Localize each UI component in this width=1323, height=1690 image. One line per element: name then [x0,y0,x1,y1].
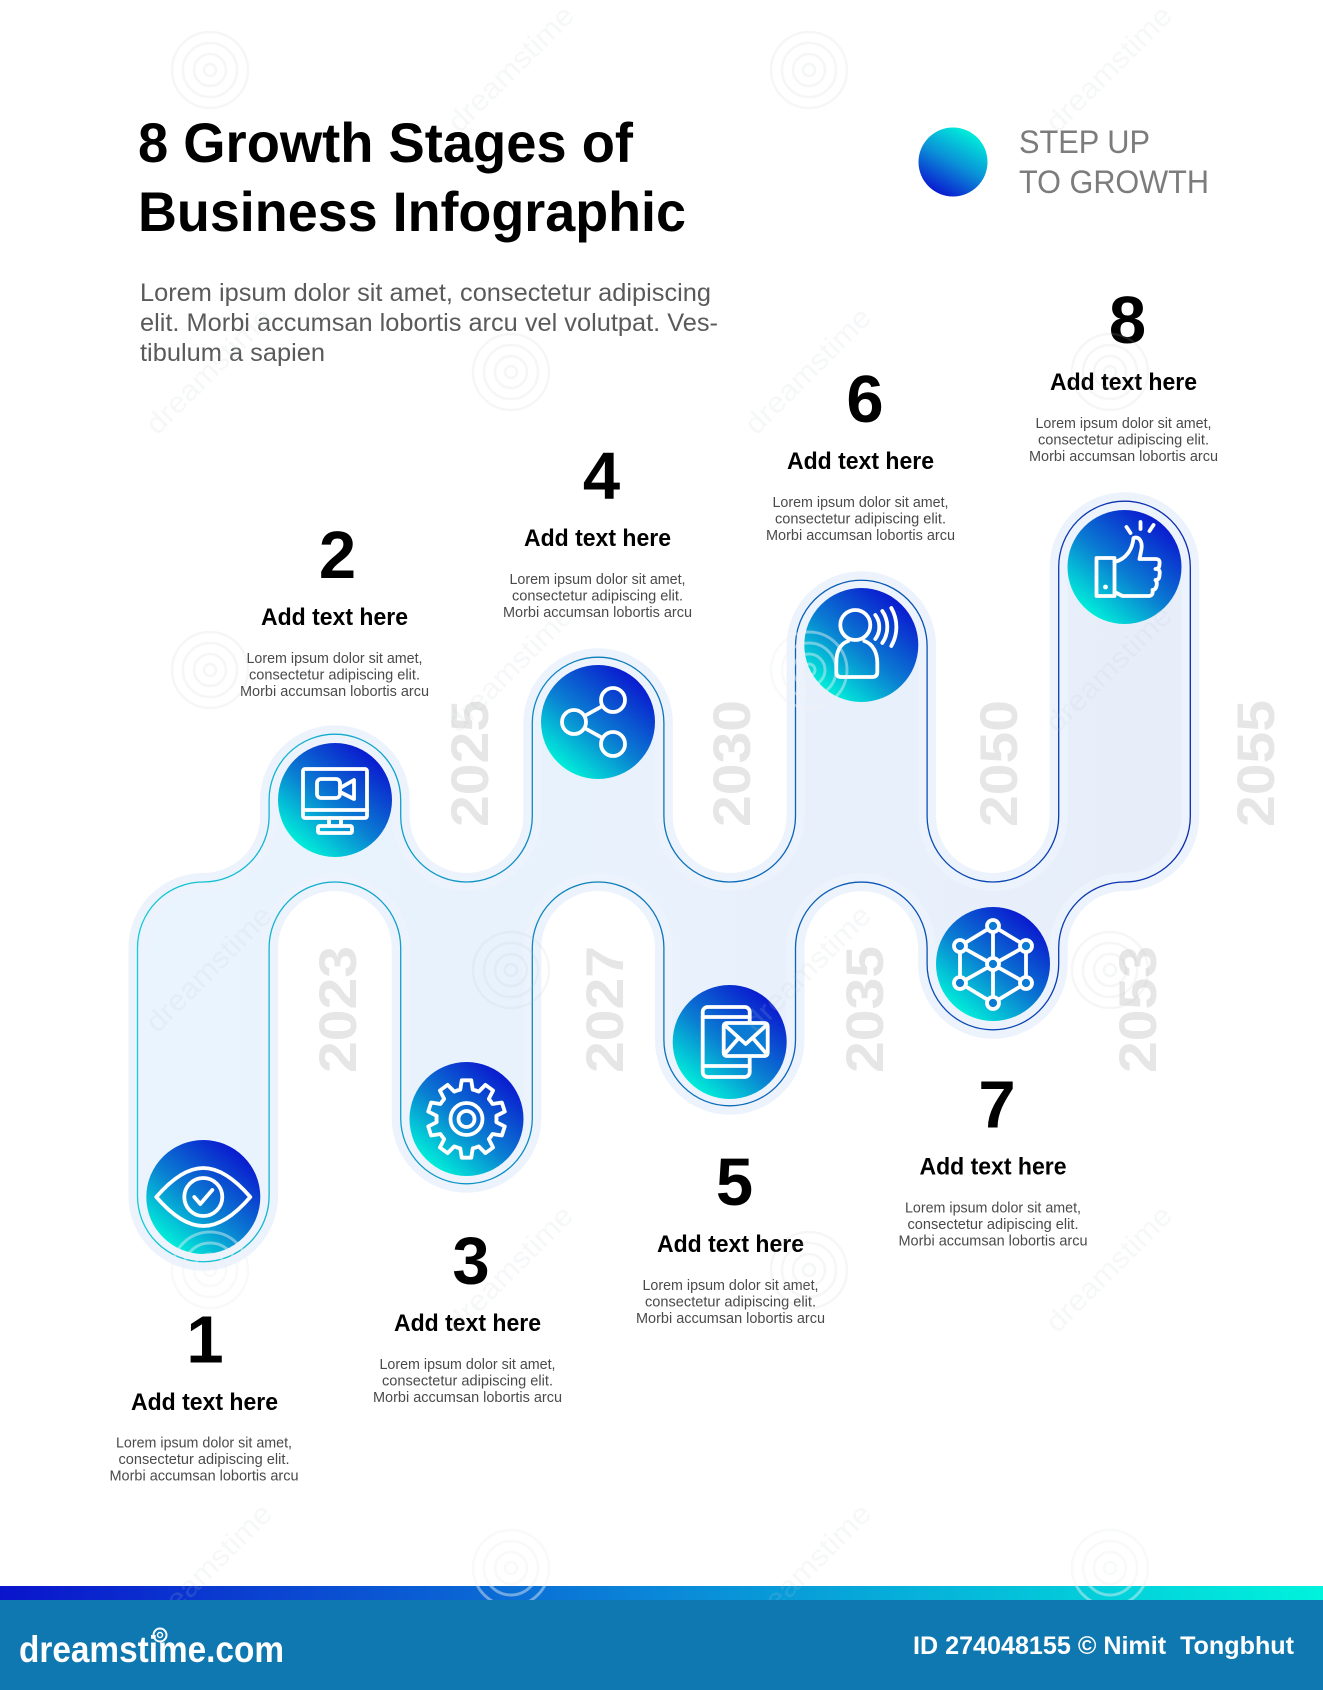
step 4 label: Lorem ipsum dolor sit amet, [510,571,686,588]
watermark text: dreamstime [1040,0,1179,139]
icon: phone with envelope [673,985,787,1099]
title: 8 Growth Stages of [138,111,633,174]
watermark text: dreamstime [739,900,878,1039]
icon: thumbs up [1068,510,1182,624]
step 2 label: Add text here [261,604,408,631]
step 6 label: Add text here [787,448,934,475]
step 3 label: consectetur adipiscing elit. [382,1372,553,1390]
step 4 label: consectetur adipiscing elit. [512,588,683,604]
step 1 label: Add text here [131,1389,278,1416]
tagline [1019,124,1209,200]
watermark text: dreamstime [739,1498,878,1637]
step 7 label: Lorem ipsum dolor sit amet, [905,1200,1081,1216]
title: Business Infographic [138,180,686,243]
step 5 label: Morbi accumsan lobortis arcu [636,1310,825,1327]
step 3 label [373,1224,562,1406]
step 3 label: Add text here [394,1310,541,1337]
year labels: 2023 [309,946,368,1073]
step 6 label: consectetur adipiscing elit. [775,510,946,528]
step 7 label: Morbi accumsan lobortis arcu [898,1232,1088,1250]
footer band [0,1600,1323,1690]
icon: gear [410,1062,524,1176]
step 7 label: consectetur adipiscing elit. [908,1216,1078,1233]
watermark spirals, grey layer [172,32,1148,1606]
icon: eye [146,1140,260,1254]
watermark spirals, white layer over colour [172,632,1148,1606]
year labels: 2035 [836,946,895,1073]
step 2 label: consectetur adipiscing elit. [249,666,420,684]
watermark text [140,0,1179,1637]
step 8 label: 8 [1109,283,1146,358]
step 8 label [1029,283,1218,465]
intro text block: tibulum a sapien [140,339,325,367]
step 4 label: Morbi accumsan lobortis arcu [503,604,692,621]
year labels: 2053 [1109,946,1168,1073]
year labels: 2027 [576,946,635,1073]
watermark text: dreamstime [739,302,878,441]
step 5 label: Add text here [657,1231,804,1258]
step 4 label: Add text here [524,525,671,552]
watermark text: dreamstime [1040,600,1179,739]
title [138,111,686,243]
step 1 label: consectetur adipiscing elit. [118,1451,290,1468]
step 8 label: consectetur adipiscing elit. [1038,432,1209,448]
step 7 label: Add text here [920,1154,1066,1180]
watermark text: dreamstime [1040,1200,1179,1339]
step 4 label [503,439,692,621]
step 1 label [110,1302,298,1484]
step 5 label [636,1145,825,1327]
watermark text: dreamstime [441,1200,580,1339]
step 2 label: 2 [319,518,356,593]
step 5 label: Lorem ipsum dolor sit amet, [642,1277,818,1294]
growth ribbon [138,501,1190,1262]
footer logo: dreamstime.com [19,1629,284,1670]
gradient bar [0,1586,1323,1600]
icon: share [541,665,655,779]
step 6 label: Morbi accumsan lobortis arcu [766,527,955,544]
step 5 label: 5 [716,1145,753,1220]
intro text block: Lorem ipsum dolor sit amet, consectetur adipiscing [140,279,711,307]
step 3 label: Lorem ipsum dolor sit amet, [380,1356,556,1373]
step 1 label: Morbi accumsan lobortis arcu [110,1468,298,1484]
step 2 label [240,518,429,700]
step 6 label: Lorem ipsum dolor sit amet, [772,494,948,511]
step 8 label: Lorem ipsum dolor sit amet, [1036,415,1212,432]
watermark text: dreamstime [140,1498,279,1637]
year labels: 2050 [970,700,1029,827]
step 1 label: Lorem ipsum dolor sit amet, [116,1434,292,1452]
step 6 label [766,362,955,544]
watermark text: dreamstime [441,600,580,739]
step 7 label [898,1068,1088,1250]
watermark text: dreamstime [140,900,279,1039]
watermark text: dreamstime [442,0,581,139]
intro text block: elit. Morbi accumsan lobortis arcu vel volutpat. Ves- [140,309,718,337]
watermark text: dreamstime [140,302,279,441]
step 3 label: Morbi accumsan lobortis arcu [373,1389,562,1406]
step 1 label: 1 [186,1302,224,1378]
intro text block [140,279,718,367]
icon: header gradient circle [918,128,988,196]
step 2 label: Lorem ipsum dolor sit amet, [246,650,422,667]
step 7 label: 7 [978,1068,1016,1142]
step 4 label: 4 [583,439,620,514]
step 6 label: 6 [846,362,884,437]
tagline: TO GROWTH [1019,164,1209,200]
year labels: 2055 [1227,700,1286,827]
step 8 label: Add text here [1050,369,1197,396]
year labels: 2025 [441,700,500,827]
year labels: 2030 [703,700,762,827]
step 5 label: consectetur adipiscing elit. [645,1294,816,1310]
tagline: STEP UP [1019,124,1150,160]
step 8 label: Morbi accumsan lobortis arcu [1029,448,1218,465]
icon: hexagon network [936,907,1050,1021]
step 3 label: 3 [452,1224,490,1299]
icon: video monitor [278,743,392,857]
step 2 label: Morbi accumsan lobortis arcu [240,683,429,700]
icon: person with sound waves [804,588,918,702]
footer credit: ID 274048155 © Nimit Tongbhut [913,1632,1295,1660]
year labels [309,700,1286,1073]
